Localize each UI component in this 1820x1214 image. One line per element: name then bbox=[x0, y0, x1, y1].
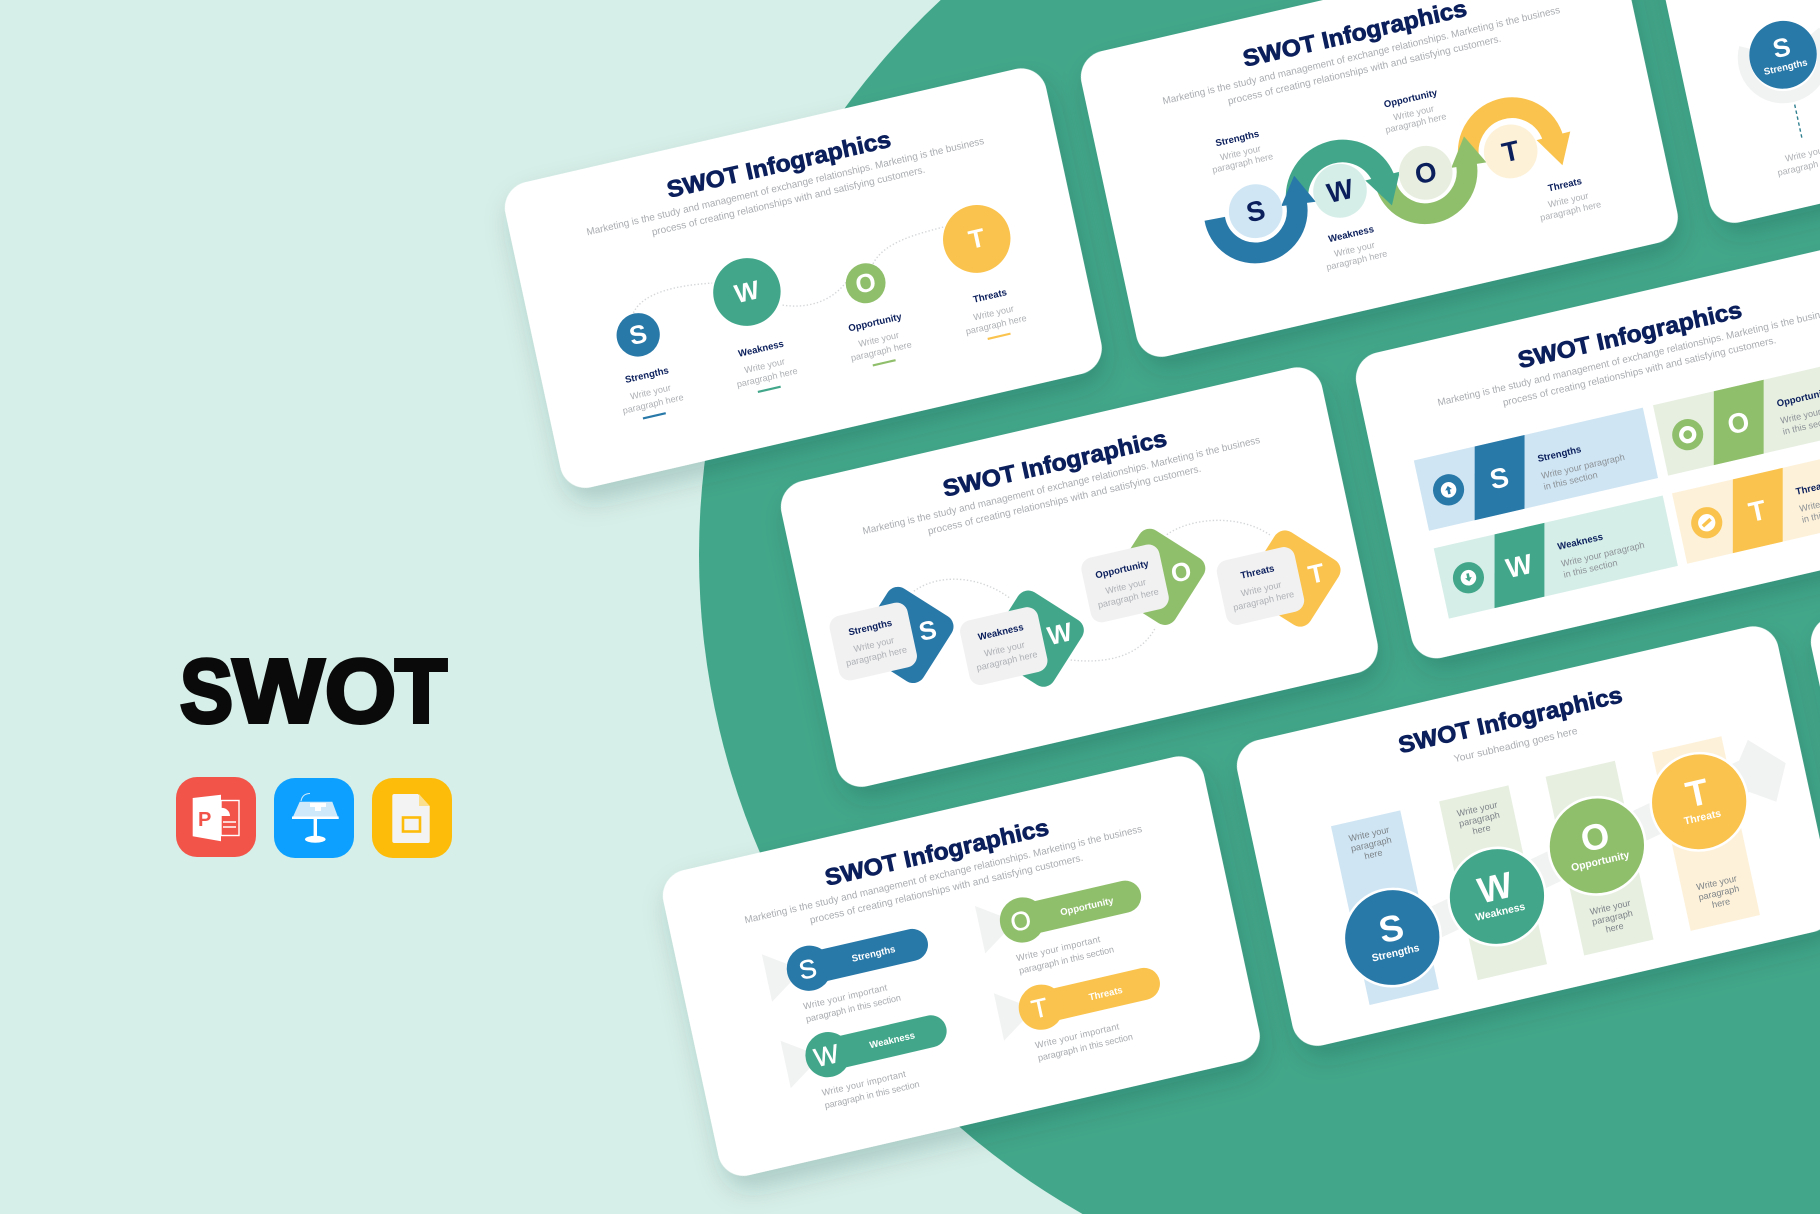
W node: W bbox=[732, 274, 762, 309]
W column: Write your bbox=[1456, 800, 1498, 819]
card title: SWOT Infographics bbox=[1515, 296, 1744, 373]
card title: SWOT Infographics bbox=[664, 126, 893, 203]
O block bbox=[1653, 352, 1820, 476]
O badge: O bbox=[1412, 155, 1440, 190]
W block: in this section bbox=[1563, 558, 1618, 580]
T pill: Write your important bbox=[1034, 1021, 1120, 1050]
O column: Opportunity bbox=[1570, 850, 1631, 874]
Weakness label: Weakness bbox=[1327, 224, 1375, 245]
W block: Weakness bbox=[1557, 532, 1604, 553]
S block bbox=[1414, 408, 1658, 531]
S column: Write your bbox=[1348, 824, 1390, 844]
T column bbox=[1639, 733, 1773, 934]
S badge bbox=[1743, 14, 1820, 95]
Weakness label bbox=[730, 337, 800, 397]
dashed line bbox=[1795, 105, 1802, 140]
main heading: SWOT: T bbox=[395, 642, 447, 742]
S diamond: paragraph here bbox=[845, 644, 908, 668]
icon: PowerPoint bbox=[176, 777, 256, 857]
Strengths label: Write your bbox=[1219, 143, 1262, 162]
card background bbox=[500, 63, 1107, 493]
T column: Threats bbox=[1683, 808, 1722, 828]
card description: Marketing is the study and management of exchange relationships. Marketing is the business bbox=[862, 435, 1261, 537]
panel: card 1 circles on dotted path bbox=[500, 63, 1107, 493]
T column: paragraph bbox=[1698, 883, 1740, 902]
S badge: Strengths bbox=[1763, 57, 1809, 78]
Opportunity label: Opportunity bbox=[847, 311, 904, 334]
W diamond: W bbox=[1045, 616, 1075, 651]
T block bbox=[1672, 441, 1820, 564]
green background circle bbox=[699, 0, 1820, 1214]
S diamond: Write your bbox=[853, 635, 895, 654]
S column: here bbox=[1363, 847, 1383, 861]
O node: O bbox=[853, 266, 879, 300]
card subheading: Your subheading goes here bbox=[1453, 726, 1579, 765]
S column: Strengths bbox=[1371, 943, 1421, 965]
T pill bbox=[994, 956, 1171, 1070]
Threats label: Write your bbox=[972, 303, 1015, 322]
S pill: Strengths bbox=[851, 944, 896, 965]
W node bbox=[707, 251, 787, 333]
Strengths label: Write your bbox=[629, 383, 672, 402]
Opportunity label: paragraph here bbox=[850, 339, 913, 363]
O diamond: paragraph here bbox=[1097, 586, 1160, 610]
card description: process of creating relationships with and satisfying customers. bbox=[651, 165, 926, 238]
W diamond: Weakness bbox=[977, 622, 1025, 643]
O node bbox=[842, 259, 889, 307]
W pill: W bbox=[811, 1038, 842, 1073]
O pill: Write your important bbox=[1015, 934, 1102, 963]
Threats label: Threats bbox=[972, 287, 1008, 306]
S pill bbox=[762, 917, 939, 1031]
W badge bbox=[1308, 159, 1372, 223]
O diamond: Opportunity bbox=[1094, 558, 1151, 581]
T node bbox=[937, 198, 1017, 280]
W block: Write your paragraph bbox=[1560, 540, 1645, 569]
Threats label bbox=[959, 284, 1029, 344]
dotted connector path bbox=[630, 226, 953, 344]
Opportunity label: Write your bbox=[858, 330, 900, 349]
card background bbox=[1351, 234, 1820, 663]
card background bbox=[1649, 0, 1820, 228]
card description: Marketing is the study and management of exchange relationships. Marketing is the business bbox=[586, 136, 985, 238]
T pill: paragraph in this section bbox=[1037, 1031, 1134, 1063]
O pill: Opportunity bbox=[1059, 895, 1115, 918]
panel: card 3 rounded diamonds bbox=[776, 362, 1383, 792]
icon: PowerPoint: P bbox=[198, 809, 211, 831]
Threats label: paragraph here bbox=[965, 313, 1028, 337]
S block: Write your paragraph bbox=[1540, 452, 1626, 481]
card description: process of creating relationships with and satisfying customers. bbox=[927, 464, 1202, 537]
W diamond: Write your bbox=[983, 640, 1026, 659]
card description: process of creating relationships with and satisfying customers. bbox=[1502, 335, 1777, 409]
W block: W bbox=[1503, 548, 1536, 584]
card title: SWOT Infographics bbox=[940, 425, 1169, 502]
Weakness label: Write your bbox=[743, 356, 786, 375]
S block: in this section bbox=[1543, 470, 1599, 492]
Opportunity label bbox=[1379, 87, 1447, 135]
T diamond: Threats bbox=[1240, 563, 1275, 582]
S column: paragraph bbox=[1350, 835, 1392, 854]
Opportunity label: paragraph here bbox=[1384, 111, 1447, 135]
arrow: T ribbon bbox=[1460, 95, 1577, 186]
W column: W bbox=[1474, 864, 1517, 912]
panel: card 7 partial at top right bbox=[1649, 0, 1820, 228]
Threats label bbox=[1534, 173, 1602, 223]
T diamond bbox=[1210, 514, 1357, 648]
S diamond: Strengths bbox=[848, 618, 893, 638]
card title: SWOT Infographics bbox=[822, 814, 1051, 891]
card description: process of creating relationships with and satisfying customers. bbox=[1227, 34, 1502, 107]
O column bbox=[1533, 758, 1666, 958]
S pill: Write your important bbox=[802, 982, 888, 1011]
W badge: W bbox=[1324, 173, 1357, 209]
card description: process of creating relationships with and satisfying customers. bbox=[809, 853, 1084, 926]
Weakness label: Write your bbox=[1333, 240, 1376, 259]
O pill: paragraph in this section bbox=[1018, 944, 1115, 976]
O diamond bbox=[1075, 512, 1221, 646]
S block: S bbox=[1487, 461, 1512, 495]
icon: Keynote bbox=[274, 778, 354, 858]
T block: T bbox=[1746, 494, 1769, 528]
S badge: S bbox=[1770, 31, 1793, 64]
card background bbox=[1232, 621, 1820, 1051]
card description: Marketing is the study and management of exchange relationships. Marketing is the business bbox=[1162, 5, 1561, 107]
O pill: O bbox=[1008, 904, 1034, 938]
panel: card 8 sliver at right edge bbox=[1806, 497, 1820, 927]
panel: card 2 wave arrows bbox=[1076, 0, 1683, 362]
O badge bbox=[1394, 141, 1458, 205]
card background bbox=[776, 362, 1383, 792]
T diamond: T bbox=[1305, 557, 1327, 590]
main heading: SWOT: W bbox=[233, 642, 324, 742]
panel: card 5 pills bbox=[658, 751, 1265, 1181]
S diamond: S bbox=[916, 614, 939, 647]
O column: Write your bbox=[1589, 898, 1631, 917]
Weakness label: Weakness bbox=[737, 339, 785, 360]
T diamond: Write your bbox=[1240, 579, 1282, 598]
T column: T bbox=[1682, 770, 1712, 816]
W diamond: paragraph here bbox=[976, 649, 1038, 673]
S pill: paragraph in this section bbox=[805, 993, 902, 1024]
S node: S bbox=[626, 318, 650, 351]
T diamond: paragraph here bbox=[1232, 589, 1295, 613]
Weakness label: paragraph here bbox=[1325, 248, 1388, 272]
main heading: SWOT bbox=[180, 642, 447, 742]
O diamond: Write your bbox=[1105, 577, 1147, 596]
panel: card 4 colour blocks bbox=[1351, 234, 1820, 663]
T badge bbox=[1479, 119, 1543, 184]
W pill: paragraph in this section bbox=[824, 1079, 920, 1111]
Threats label: Write your bbox=[1547, 190, 1589, 210]
card background bbox=[1076, 0, 1683, 362]
W pill bbox=[781, 1004, 958, 1117]
card background bbox=[658, 751, 1265, 1181]
W column: Weakness bbox=[1475, 902, 1526, 924]
S pill: S bbox=[796, 953, 819, 986]
Weakness label bbox=[1320, 222, 1388, 272]
W block bbox=[1434, 496, 1678, 619]
Strengths label bbox=[616, 363, 686, 424]
Threats label: Threats bbox=[1547, 176, 1583, 194]
W column bbox=[1427, 782, 1561, 983]
Opportunity label: Write your bbox=[1392, 103, 1435, 122]
T pill: Threats bbox=[1088, 985, 1124, 1003]
O column: O bbox=[1577, 814, 1613, 860]
Opportunity label: Opportunity bbox=[1383, 87, 1439, 111]
paragraph bbox=[1774, 142, 1820, 178]
O pill bbox=[975, 869, 1152, 982]
Opportunity label bbox=[844, 311, 914, 371]
card background bbox=[1806, 497, 1820, 927]
gray background arrow bbox=[1382, 733, 1807, 951]
T node: T bbox=[966, 222, 988, 255]
Weakness label: paragraph here bbox=[736, 366, 799, 389]
Strengths label bbox=[1206, 127, 1274, 175]
S column: S bbox=[1375, 906, 1407, 951]
arrow: O ribbon bbox=[1379, 133, 1494, 222]
Strengths label: Strengths bbox=[1215, 129, 1260, 149]
main heading: SWOT: S bbox=[180, 642, 233, 742]
Strengths label: paragraph here bbox=[1211, 151, 1274, 175]
main heading: SWOT: O bbox=[325, 642, 396, 742]
card title: SWOT Infographics bbox=[1396, 681, 1625, 758]
O block: O bbox=[1725, 405, 1752, 441]
arrow: S ribbon bbox=[1210, 172, 1324, 261]
icon: Google Slides bbox=[372, 778, 452, 858]
W pill: Weakness bbox=[869, 1030, 916, 1051]
S badge: S bbox=[1243, 194, 1268, 228]
S badge bbox=[1224, 179, 1288, 243]
T pill: T bbox=[1029, 992, 1051, 1025]
T column: here bbox=[1711, 896, 1731, 910]
S diamond bbox=[823, 570, 970, 704]
O column: paragraph bbox=[1591, 908, 1634, 927]
W column: paragraph bbox=[1458, 810, 1501, 829]
O diamond: O bbox=[1168, 555, 1194, 589]
W pill: Write your important bbox=[821, 1069, 907, 1098]
card description: Marketing is the study and management of exchange relationships. Marketing is the business bbox=[744, 824, 1143, 926]
W column: here bbox=[1472, 822, 1491, 836]
T column: Write your bbox=[1695, 873, 1738, 892]
Strengths label: Strengths bbox=[624, 365, 670, 386]
S node bbox=[612, 309, 664, 361]
dotted connector path bbox=[913, 506, 1288, 699]
panel: card 6 circles on columns bbox=[1232, 621, 1820, 1051]
Threats label: paragraph here bbox=[1539, 199, 1602, 223]
gray ring bbox=[1741, 31, 1820, 105]
arrow: W ribbon bbox=[1289, 138, 1406, 226]
S column bbox=[1319, 807, 1452, 1008]
W diamond bbox=[954, 574, 1100, 708]
T badge: T bbox=[1499, 134, 1522, 169]
S block: Strengths bbox=[1537, 444, 1582, 465]
O column: here bbox=[1605, 921, 1624, 935]
Strengths label: paragraph here bbox=[622, 392, 684, 416]
